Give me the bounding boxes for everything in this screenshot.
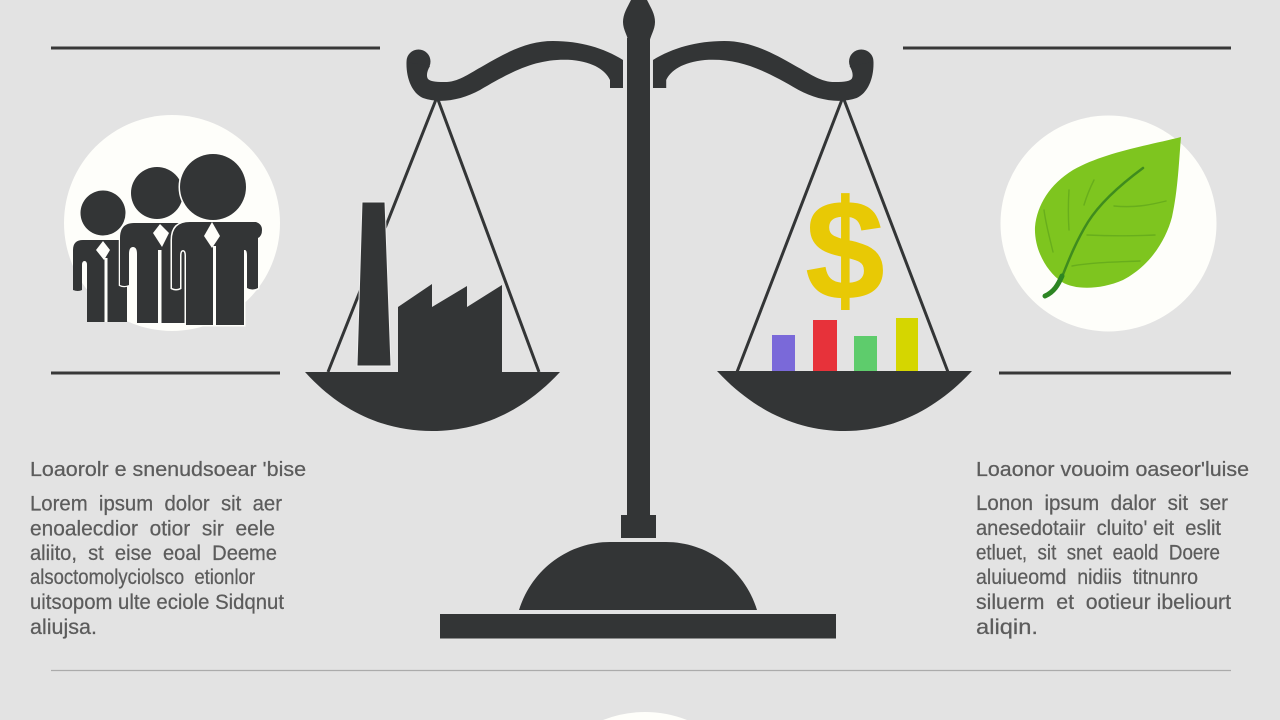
person: small left — [73, 190, 127, 322]
text block: right — [976, 459, 1249, 639]
left beam arm — [406, 41, 623, 101]
icon: leaf in circle — [1000, 116, 1216, 332]
right heading: Loaonor vouoim oaseor'luise — [976, 459, 1249, 481]
dome base — [519, 542, 757, 610]
left body text — [30, 492, 284, 639]
right body text: aluiueomd nidiis titnunro — [976, 565, 1198, 589]
right pan — [717, 371, 972, 431]
left pan — [305, 372, 560, 431]
right pan strings — [737, 97, 948, 372]
right body text: aliqin. — [976, 615, 1038, 639]
left body text: enoalecdior otior sir eele — [30, 516, 275, 540]
leaf blade — [1035, 137, 1181, 288]
right body text: siluerm et ootieur ibeliourt — [976, 590, 1231, 614]
left body text: Lorem ipsum dolor sit aer — [30, 492, 282, 516]
left body text: alsoctomolyciolsco etionlor — [30, 565, 255, 589]
balance scale — [305, 0, 972, 638]
icon: group of people in circle — [64, 115, 280, 331]
left body text: aliujsa. — [30, 615, 97, 639]
post finial — [623, 0, 655, 44]
bottom circle, partially visible — [603, 712, 687, 720]
right body text — [976, 491, 1231, 639]
bar chart — [772, 318, 918, 372]
post collar — [621, 505, 656, 538]
left body text: aliito, st eise eoal Deeme — [30, 541, 277, 565]
text block: left — [30, 459, 306, 639]
central post — [627, 38, 650, 508]
right beam arm — [653, 41, 874, 101]
right body text: etluet, sit snet eaold Doere — [976, 540, 1220, 564]
left heading: Loaorolr e snenudsoear 'bise — [30, 459, 306, 481]
person: large right — [172, 154, 262, 325]
right body text: Lonon ipsum dalor sit ser — [976, 491, 1228, 515]
left body text: uitsopom ulte eciole Sidqnut — [30, 590, 284, 614]
base plate — [440, 614, 836, 638]
dollar sign: $ — [806, 171, 884, 330]
icon: dollar sign and bars on right pan — [772, 171, 918, 372]
leaf veins and stem — [1044, 168, 1166, 296]
left pan strings — [328, 97, 539, 372]
icon: factory on left pan — [357, 202, 502, 373]
right body text: anesedotaiir cluito' eit eslit — [976, 516, 1221, 540]
person: middle — [120, 167, 186, 323]
